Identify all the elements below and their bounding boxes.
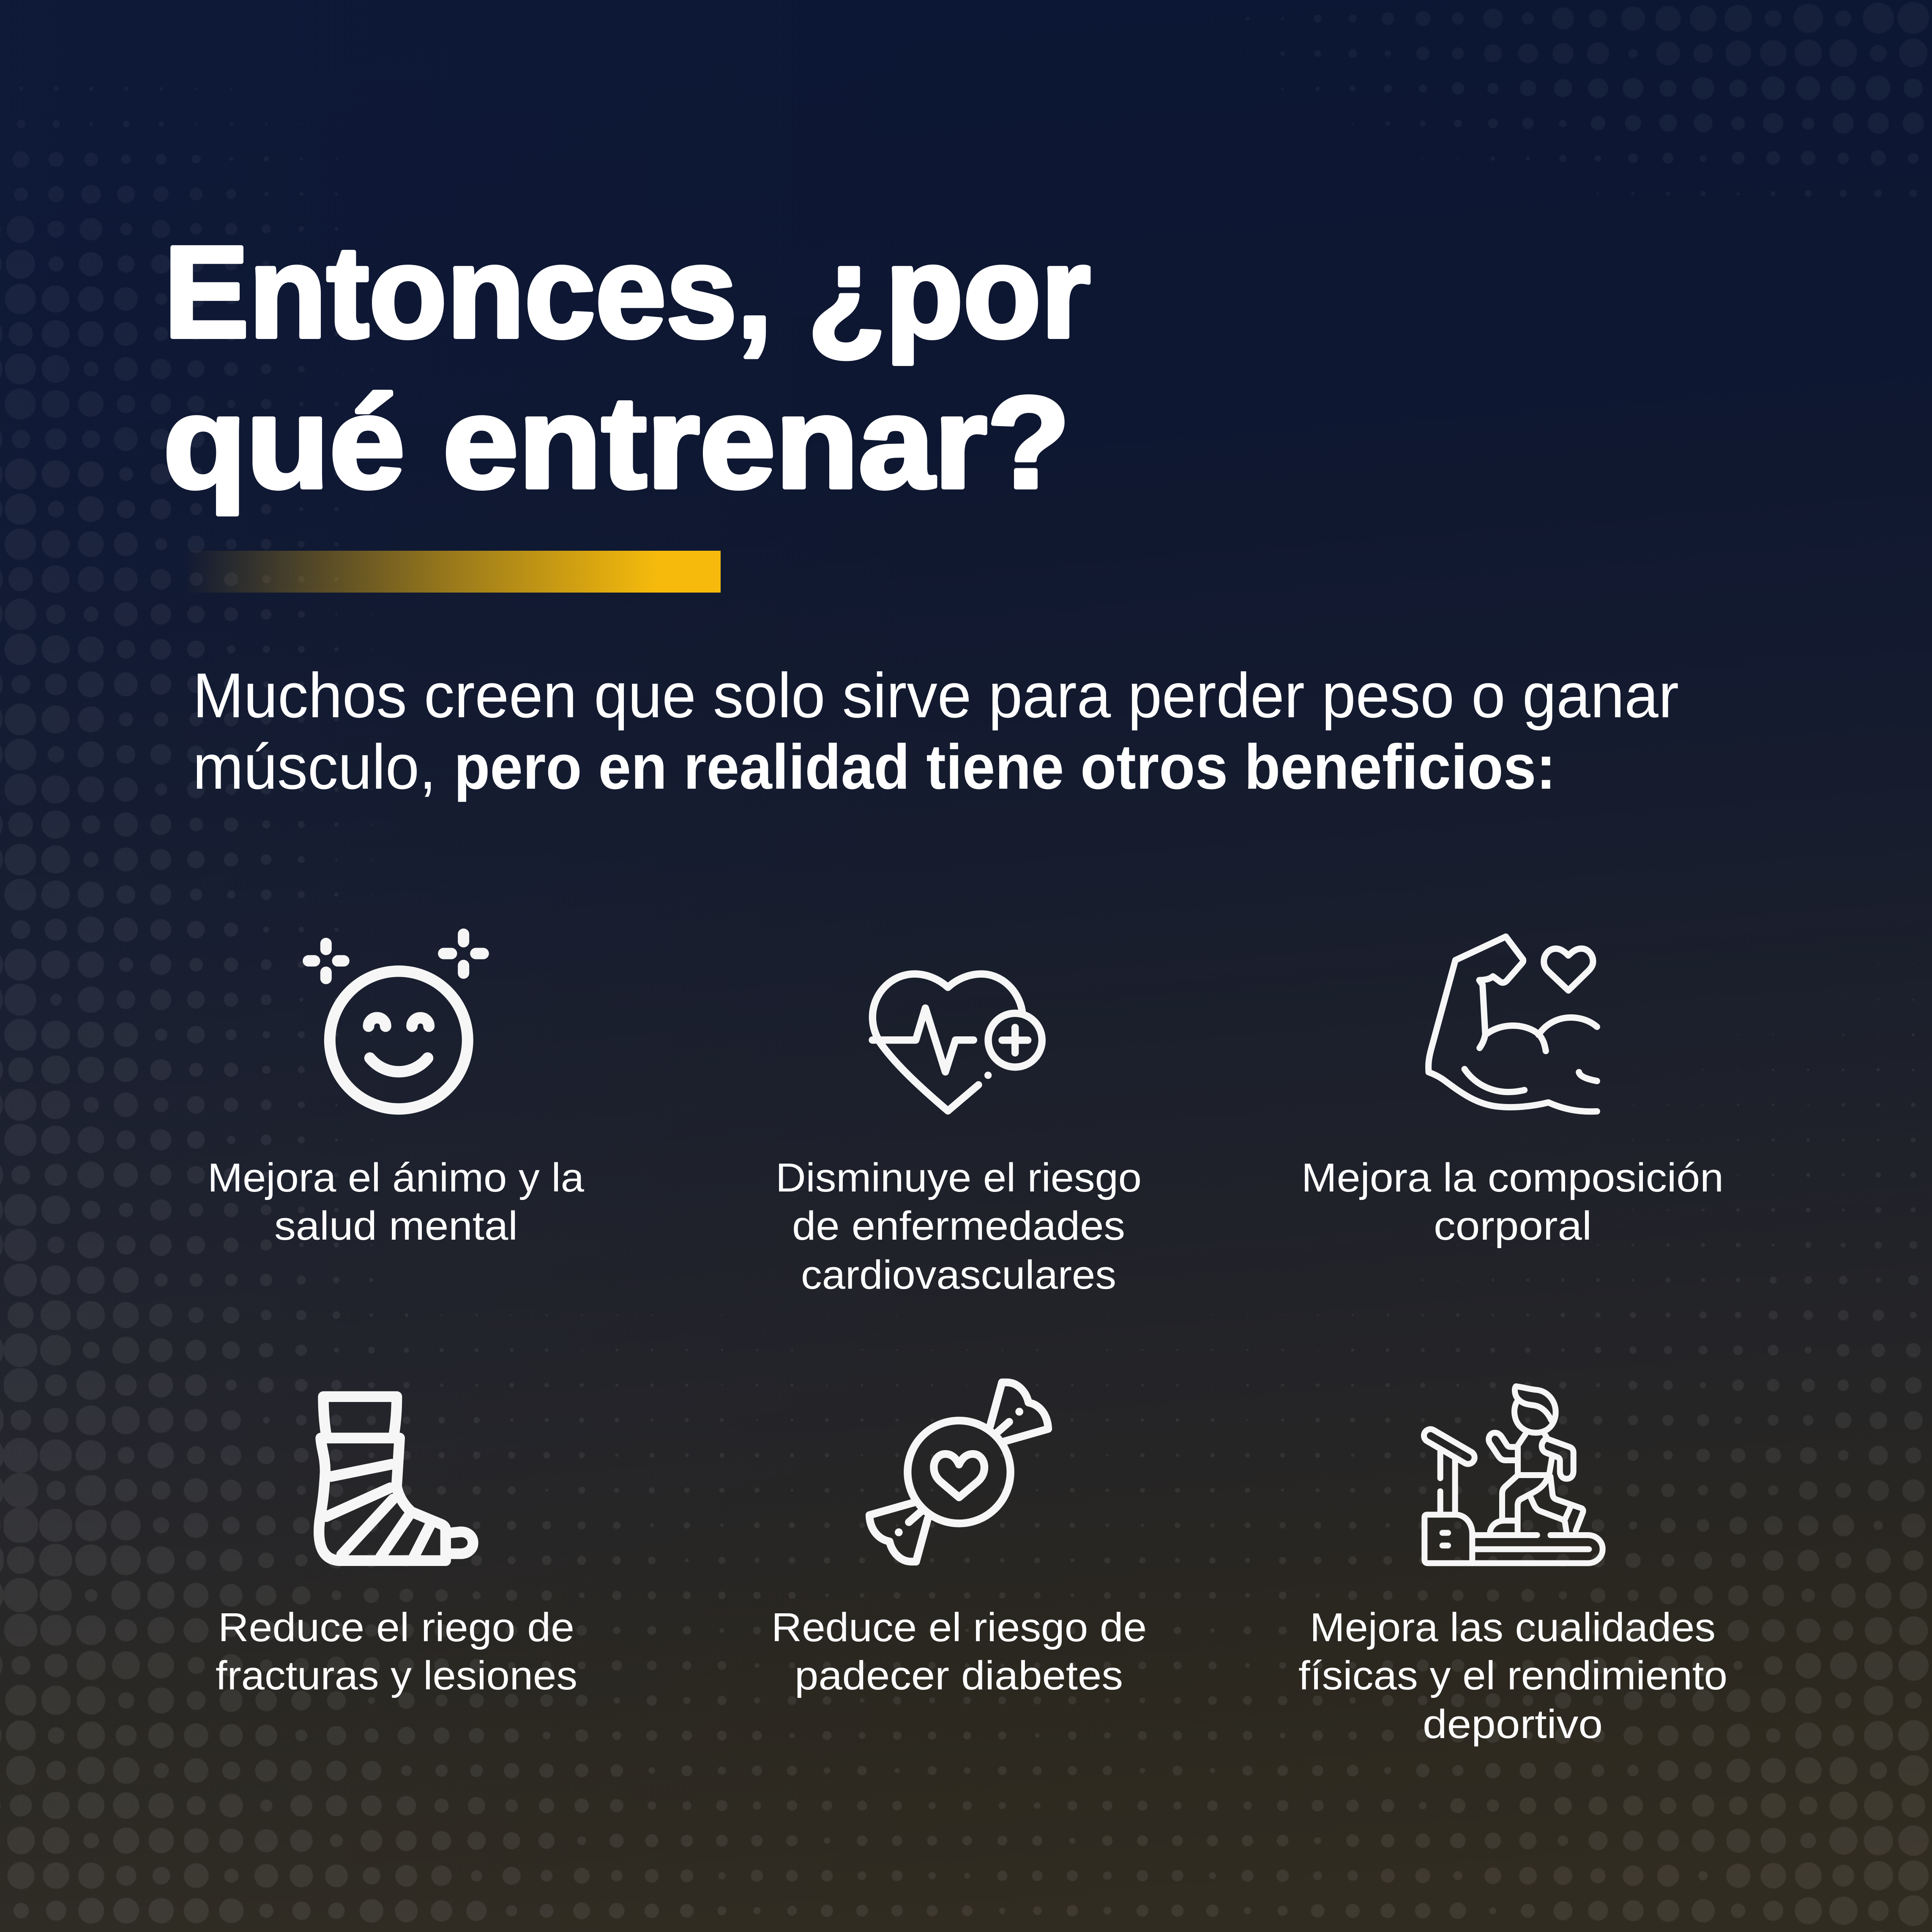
benefit: physical performance: [1298, 1386, 1727, 1747]
benefit: mood and mental health: [208, 934, 585, 1249]
title: [163, 219, 1090, 516]
label: fractures: fracturas y lesiones: [216, 1653, 577, 1698]
label: mood: Mejora el ánimo y la: [208, 1155, 585, 1200]
label: cardiovascular: [776, 1155, 1142, 1298]
label: body composition: corporal: [1434, 1203, 1592, 1249]
benefit: fractures and injuries: [216, 1396, 577, 1698]
intro text: músculo,: [193, 731, 436, 802]
icon: flexed arm with heart: [1429, 937, 1597, 1112]
benefit: body composition: [1301, 937, 1724, 1249]
label: physical performance: físicas y el rendimiento: [1298, 1653, 1727, 1698]
label: physical performance: deportivo: [1423, 1702, 1603, 1747]
label: body composition: [1301, 1155, 1724, 1249]
label: cardiovascular: cardiovasculares: [801, 1252, 1116, 1298]
label: diabetes: padecer diabetes: [795, 1653, 1123, 1698]
title: Entonces, ¿por: [164, 219, 1090, 365]
label: fractures: [216, 1605, 577, 1698]
label: fractures: Reduce el riego de: [218, 1605, 574, 1650]
intro text: [193, 660, 1679, 802]
benefit: cardiovascular disease: [776, 974, 1142, 1298]
yellow accent bar: [185, 551, 721, 593]
label: cardiovascular: Disminuye el riesgo: [776, 1155, 1142, 1200]
label: physical performance: Mejora las cualidades: [1310, 1605, 1716, 1650]
label: diabetes: [771, 1605, 1147, 1698]
intro text: Muchos creen que solo sirve para perder peso o ganar: [193, 660, 1679, 731]
title: qué entrenar?: [163, 370, 1070, 516]
icon: heart with pulse and plus: [872, 974, 1042, 1111]
intro text: pero en realidad tiene otros beneficios:: [454, 731, 1556, 802]
label: diabetes: Reduce el riesgo de: [771, 1605, 1147, 1650]
label: mood: salud mental: [274, 1203, 518, 1249]
icon: smiling face with sparkles: [309, 934, 483, 1109]
label: body composition: Mejora la composición: [1301, 1155, 1724, 1200]
icon: foot cast: [319, 1396, 473, 1560]
icon: person on treadmill: [1424, 1386, 1603, 1563]
label: physical performance: [1298, 1605, 1727, 1747]
label: cardiovascular: de enfermedades: [792, 1203, 1125, 1249]
benefit: diabetes: [771, 1383, 1147, 1698]
icon: candy with heart: [869, 1383, 1048, 1562]
label: mood: [208, 1155, 585, 1249]
